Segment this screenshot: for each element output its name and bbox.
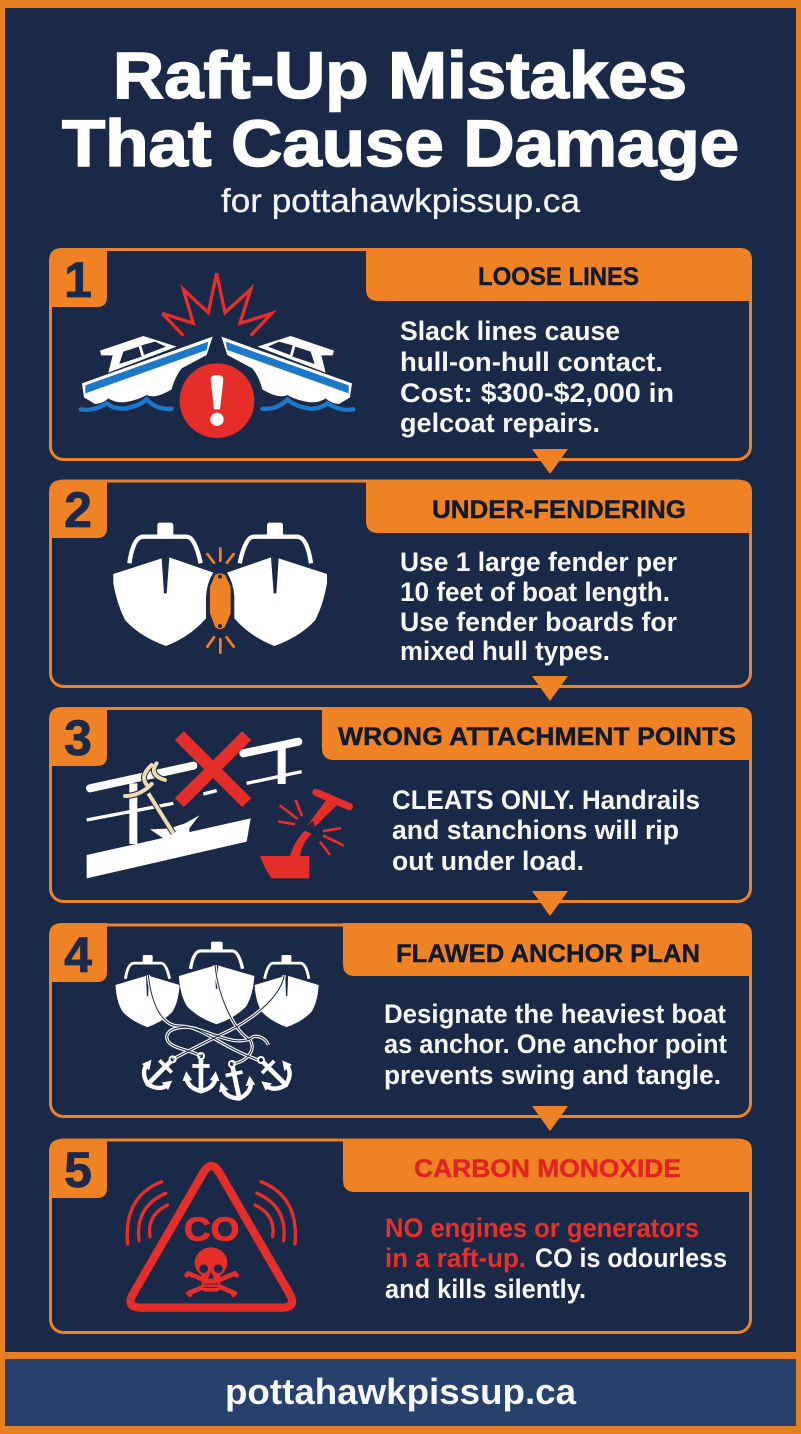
header: carbon monoxide: CARBON MONOXIDE bbox=[414, 1155, 681, 1183]
header: wrong attachment points: WRONG ATTACHMENT POINTS bbox=[338, 723, 736, 751]
text: flawed anchor plan: Designate the heaviest boat bbox=[384, 999, 726, 1029]
footer bbox=[5, 1359, 796, 1426]
text: under-fendering: Use 1 large fender per bbox=[400, 547, 677, 577]
panel 1: loose lines bbox=[49, 248, 752, 460]
arrow 3 bbox=[532, 891, 568, 916]
panel 5: carbon monoxide bbox=[49, 1139, 752, 1332]
badge 4: 4 bbox=[64, 927, 92, 983]
text: loose lines: Cost: $300-$2,000 in bbox=[400, 378, 674, 408]
arrow 1 bbox=[532, 449, 568, 474]
text: loose lines bbox=[400, 316, 674, 438]
text: under-fendering: 10 feet of boat length. bbox=[400, 577, 670, 607]
icon: two hulls with fender bbox=[113, 523, 327, 653]
badge 2 bbox=[49, 480, 107, 538]
text: carbon monoxide: CO is odourless bbox=[535, 1243, 727, 1273]
header: wrong attachment points bbox=[322, 707, 752, 760]
badge 1: 1 bbox=[64, 252, 92, 308]
header: carbon monoxide bbox=[343, 1139, 752, 1192]
text: flawed anchor plan: prevents swing and tangle. bbox=[384, 1060, 721, 1090]
text: loose lines: hull-on-hull contact. bbox=[400, 347, 663, 377]
badge 2: 2 bbox=[64, 482, 92, 538]
icon: cleat, handrail and broken stanchion bbox=[87, 736, 349, 878]
text: under-fendering: mixed hull types. bbox=[400, 636, 610, 666]
panel 3: wrong attachment points bbox=[49, 707, 752, 902]
panel 4: flawed anchor plan bbox=[49, 923, 752, 1116]
text: carbon monoxide: and kills silently. bbox=[385, 1274, 586, 1304]
title: That Cause Damage bbox=[62, 106, 739, 180]
title bbox=[62, 38, 739, 180]
badge 3 bbox=[49, 707, 107, 766]
icon: CO warning triangle: CO bbox=[184, 1212, 239, 1249]
title: Raft-Up Mistakes bbox=[113, 38, 687, 112]
icon: colliding boats bbox=[81, 273, 353, 438]
text: wrong attachment points bbox=[392, 785, 700, 876]
text: flawed anchor plan: as anchor. One anchor point bbox=[384, 1029, 727, 1059]
text: carbon monoxide bbox=[385, 1213, 727, 1304]
header: loose lines: LOOSE LINES bbox=[478, 263, 639, 291]
text: loose lines: Slack lines cause bbox=[400, 316, 620, 346]
text: wrong attachment points: and stanchions will rip bbox=[392, 815, 679, 845]
text: under-fendering: Use fender boards for bbox=[400, 607, 677, 637]
badge 5 bbox=[49, 1139, 107, 1198]
header: flawed anchor plan bbox=[343, 923, 752, 976]
badge 3: 3 bbox=[64, 710, 92, 766]
header: under-fendering: UNDER-FENDERING bbox=[432, 496, 686, 524]
header: loose lines bbox=[366, 248, 752, 301]
arrow 2 bbox=[532, 676, 568, 701]
badge 1 bbox=[49, 248, 107, 308]
subtitle: for pottahawkpissup.ca bbox=[221, 182, 581, 219]
text: carbon monoxide: in a raft-up. bbox=[385, 1243, 526, 1273]
text: wrong attachment points: out under load. bbox=[392, 846, 584, 876]
text: carbon monoxide: NO engines or generators bbox=[385, 1213, 699, 1243]
badge 4 bbox=[49, 923, 107, 983]
text: under-fendering bbox=[400, 547, 677, 666]
arrow 4 bbox=[532, 1106, 568, 1131]
panel 2: under-fendering bbox=[49, 480, 752, 686]
icon: three boats with tangled anchors bbox=[115, 942, 319, 1102]
badge 5: 5 bbox=[64, 1142, 92, 1198]
icon: CO warning triangle bbox=[127, 1166, 295, 1308]
footer: pottahawkpissup.ca bbox=[225, 1371, 577, 1412]
header: flawed anchor plan: FLAWED ANCHOR PLAN bbox=[396, 940, 700, 968]
text: loose lines: gelcoat repairs. bbox=[400, 408, 600, 438]
text: flawed anchor plan bbox=[384, 999, 727, 1090]
header: under-fendering bbox=[366, 480, 752, 533]
text: wrong attachment points: CLEATS ONLY. Handrails bbox=[392, 785, 700, 815]
